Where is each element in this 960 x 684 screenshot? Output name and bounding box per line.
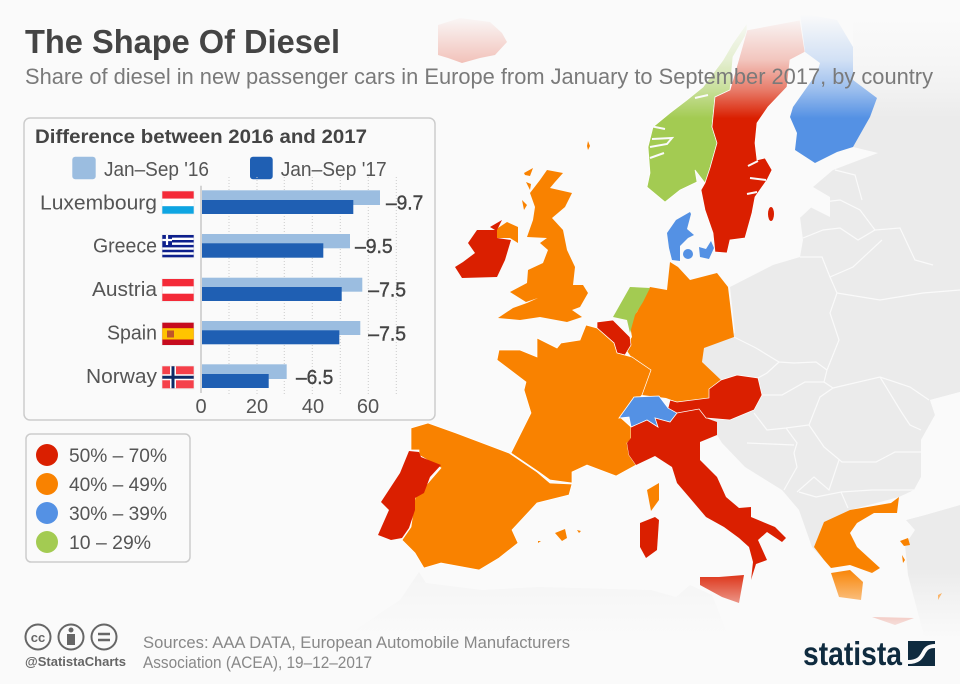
legend item: 30-39: 30% – 39% bbox=[69, 504, 167, 525]
difference values: –6.5 bbox=[296, 367, 333, 389]
panel box bbox=[24, 118, 435, 420]
licence icons: cc bbox=[31, 630, 45, 645]
source bbox=[143, 634, 570, 672]
Ireland bbox=[455, 220, 511, 278]
Portugal bbox=[378, 451, 441, 540]
country labels: Luxembourg bbox=[40, 192, 157, 214]
legend item: 30-39 bbox=[36, 502, 167, 525]
legend item: 50-70 bbox=[36, 444, 167, 467]
country labels bbox=[40, 192, 158, 388]
grid lines bbox=[229, 177, 396, 395]
country labels: Norway bbox=[86, 366, 157, 388]
subtitle: Share of diesel in new passenger cars in Europe from January to September 2017, by country bbox=[25, 64, 933, 89]
country labels: Austria bbox=[92, 279, 158, 301]
panel heading: Difference between 2016 and 2017 bbox=[35, 127, 367, 148]
panel: difference chart bbox=[24, 118, 435, 420]
legend: Jan-Sep 17: Jan–Sep '17 bbox=[281, 159, 387, 181]
Greece bbox=[814, 497, 942, 625]
Scottish islands bbox=[522, 141, 590, 210]
axis line bbox=[200, 186, 202, 393]
title: The Shape Of Diesel bbox=[25, 23, 340, 60]
France bbox=[497, 325, 651, 483]
Norway fjords bbox=[650, 95, 708, 158]
Germany bbox=[625, 262, 734, 402]
flag: Spain bbox=[162, 322, 194, 346]
Switzerland bbox=[619, 396, 677, 427]
flag: Austria bbox=[162, 278, 194, 302]
legend: Jan-Sep 16: Jan–Sep '16 bbox=[104, 159, 209, 181]
Netherlands bbox=[613, 287, 650, 333]
map colour legend bbox=[26, 434, 190, 562]
axis labels bbox=[195, 396, 379, 418]
legend: Jan-Sep 17 bbox=[250, 157, 387, 181]
difference values: –7.5 bbox=[368, 324, 406, 346]
Northern Ireland bbox=[495, 222, 518, 243]
country labels: Spain bbox=[107, 322, 157, 344]
legend item: 50-70: 50% – 70% bbox=[69, 446, 167, 467]
grey land: non-covered countries bbox=[340, 20, 960, 640]
twitter handle: @StatistaCharts bbox=[25, 655, 126, 669]
country labels: Greece bbox=[93, 236, 157, 258]
bar chart bbox=[202, 190, 380, 388]
Norway bbox=[647, 23, 747, 202]
Belgium bbox=[597, 320, 631, 355]
source: Sources: AAA DATA, European Automobile Manufacturers bbox=[143, 634, 570, 652]
Black Sea bbox=[906, 392, 960, 520]
difference values: –9.5 bbox=[355, 236, 393, 258]
grey land borders bbox=[734, 170, 960, 508]
Finland bbox=[790, 13, 877, 163]
flag: Luxembourg bbox=[162, 190, 194, 214]
legend item: 40-49 bbox=[36, 473, 167, 496]
Iceland bbox=[438, 18, 507, 63]
legend: Jan-Sep 16 bbox=[72, 157, 209, 181]
Sicily bbox=[700, 575, 744, 603]
Italy bbox=[627, 409, 786, 580]
map top fade bbox=[430, 0, 960, 122]
source: Association (ACEA), 19–12–2017 bbox=[143, 654, 372, 672]
map bottom fade bbox=[330, 568, 960, 640]
difference values: –7.5 bbox=[368, 280, 406, 302]
Denmark bbox=[667, 212, 714, 261]
statista logo: statista bbox=[803, 635, 903, 672]
axis labels: 60 bbox=[357, 396, 379, 418]
axis labels: 0 bbox=[195, 396, 207, 418]
axis labels: 40 bbox=[302, 396, 324, 418]
Great Britain bbox=[498, 170, 588, 322]
difference values: –9.7 bbox=[386, 192, 423, 214]
Sardinia bbox=[640, 517, 659, 558]
legend item: 10-29 bbox=[36, 531, 151, 554]
Corsica bbox=[647, 483, 659, 511]
Spain bbox=[402, 423, 572, 570]
axis labels: 20 bbox=[246, 396, 268, 418]
flag: Greece bbox=[162, 234, 194, 258]
licence icons bbox=[26, 624, 116, 650]
legend box bbox=[26, 434, 190, 562]
flag: Norway bbox=[162, 366, 194, 390]
legend item: 40-49: 40% – 49% bbox=[69, 475, 167, 496]
Sweden inlets and Gotland bbox=[747, 161, 774, 221]
Austria bbox=[668, 375, 762, 420]
Balearic islands bbox=[538, 529, 581, 543]
legend item: 10-29: 10 – 29% bbox=[69, 533, 151, 554]
Sweden bbox=[701, 20, 805, 253]
difference values bbox=[296, 192, 423, 389]
map of Europe bbox=[340, 13, 960, 640]
